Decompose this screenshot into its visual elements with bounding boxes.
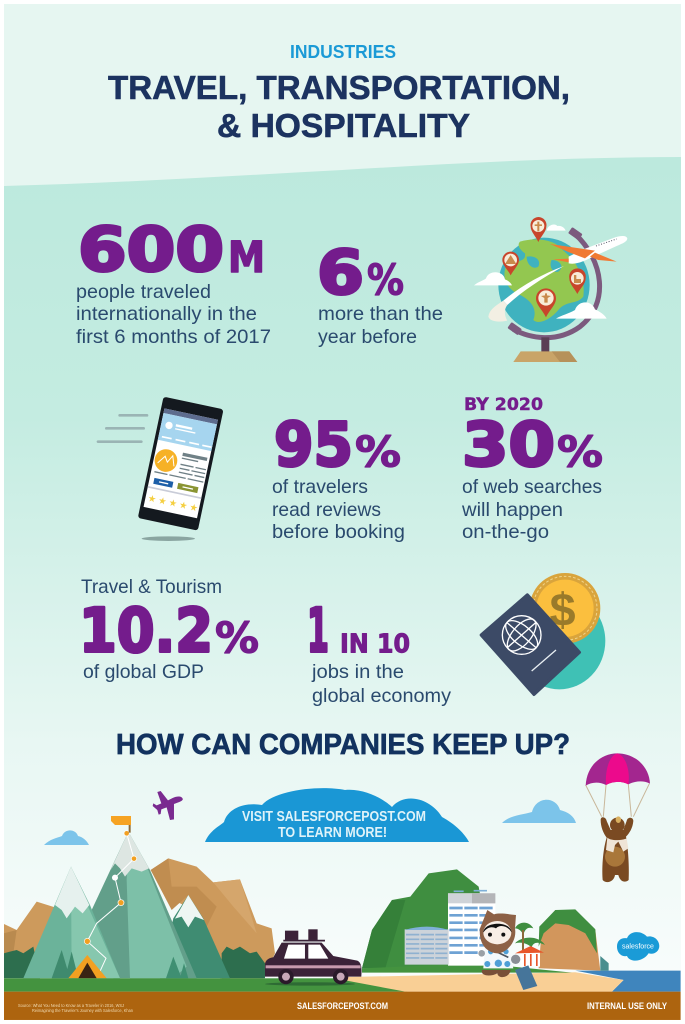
footer text: Source: What You Need to Know as a Traveler in 2016, WSJ [18,1003,124,1008]
stat: 95 percent: % [355,428,401,476]
stat: 10.2 percent of GDP [79,576,259,683]
icon: smartphone with reviews: ★ [157,495,168,507]
stat: 10.2 percent of GDP: of global GDP [83,661,204,683]
stat: 10.2 percent of GDP: 10.2 [79,596,213,666]
stat: 600M travelers: first 6 months of 2017 [76,326,271,348]
footer text: SALESFORCEPOST.COM [297,1001,388,1012]
stat: 95 percent: of travelers [272,476,368,498]
astro character with suitcase [478,910,537,990]
palms and beach hut [515,923,545,967]
stat: 30 percent by 2020 [461,395,603,543]
stat: 600M travelers: people traveled [76,281,211,303]
stat: 6 percent: 6 [317,238,364,308]
parachuting bear [586,753,650,882]
car with luggage [265,929,362,986]
header [108,42,570,144]
icon: passport and coin: $ [550,584,576,636]
icon: passport and coin [481,573,605,694]
mountains scene [4,816,275,978]
callout cloud: visit salesforcepost: VISIT SALESFORCEPOST.COM [242,809,426,825]
stat: 6 percent: year before [318,326,417,348]
small clouds [44,800,576,845]
footer text: Reimagining the Traveler's Journey with Salesforce, Khan [32,1008,133,1013]
icon: smartphone with reviews: ★ [189,502,199,513]
stat: 95 percent: before booking [272,521,405,543]
island with hotels [362,869,609,973]
callout cloud: visit salesforcepost [205,788,469,842]
stat: 10.2 percent of GDP: % [215,614,259,662]
footer text [18,1001,668,1013]
question heading: HOW CAN COMPANIES KEEP UP? [116,729,570,761]
header: TRAVEL, TRANSPORTATION, [108,69,570,106]
stat: 6 percent [317,238,443,348]
salesforce logo [617,932,659,961]
stat: 600M travelers: 600 [78,214,224,286]
stat: 600M travelers: M [228,233,265,283]
icon: globe with plane [474,217,627,362]
stat: 10.2 percent of GDP: Travel & Tourism [81,576,222,598]
stat: 1 in 10 jobs: global economy [312,685,451,707]
stat: 30 percent by 2020: will happen [461,499,563,521]
stat: 95 percent: read reviews [272,499,381,521]
icon: smartphone with reviews: ★ [147,493,157,505]
stat: 6 percent: more than the [318,303,443,325]
stat: 1 in 10 jobs: IN 10 [340,630,410,660]
stat: 30 percent by 2020: on-the-go [462,521,549,543]
header: & HOSPITALITY [217,107,470,144]
icon: smartphone with reviews: ★ [178,500,188,511]
ground, beach and sea [4,971,681,1020]
stat: 1 in 10 jobs [307,596,451,707]
stat: 1 in 10 jobs: jobs in the [311,661,404,683]
stat: 95 percent [272,410,405,543]
stat: 30 percent by 2020: of web searches [462,476,602,498]
icon: purple plane [153,791,183,820]
stat: 1 in 10 jobs: 1 [307,596,329,666]
callout cloud: visit salesforcepost: TO LEARN MORE! [278,825,387,841]
stat: 30 percent by 2020: % [557,428,603,476]
salesforce logo: salesforce [622,944,654,951]
icon: smartphone with reviews [97,397,224,541]
stat: 95 percent: 95 [274,410,353,480]
footer text: INTERNAL USE ONLY [587,1001,668,1012]
stat: 30 percent by 2020: BY 2020 [464,395,543,414]
stat: 600M travelers: internationally in the [76,303,257,325]
icon: smartphone with reviews: ★ [168,497,178,509]
stat: 30 percent by 2020: 30 [462,410,555,480]
header: INDUSTRIES [290,42,396,62]
stat: 600M travelers [76,214,271,348]
stat: 6 percent: % [367,256,404,304]
